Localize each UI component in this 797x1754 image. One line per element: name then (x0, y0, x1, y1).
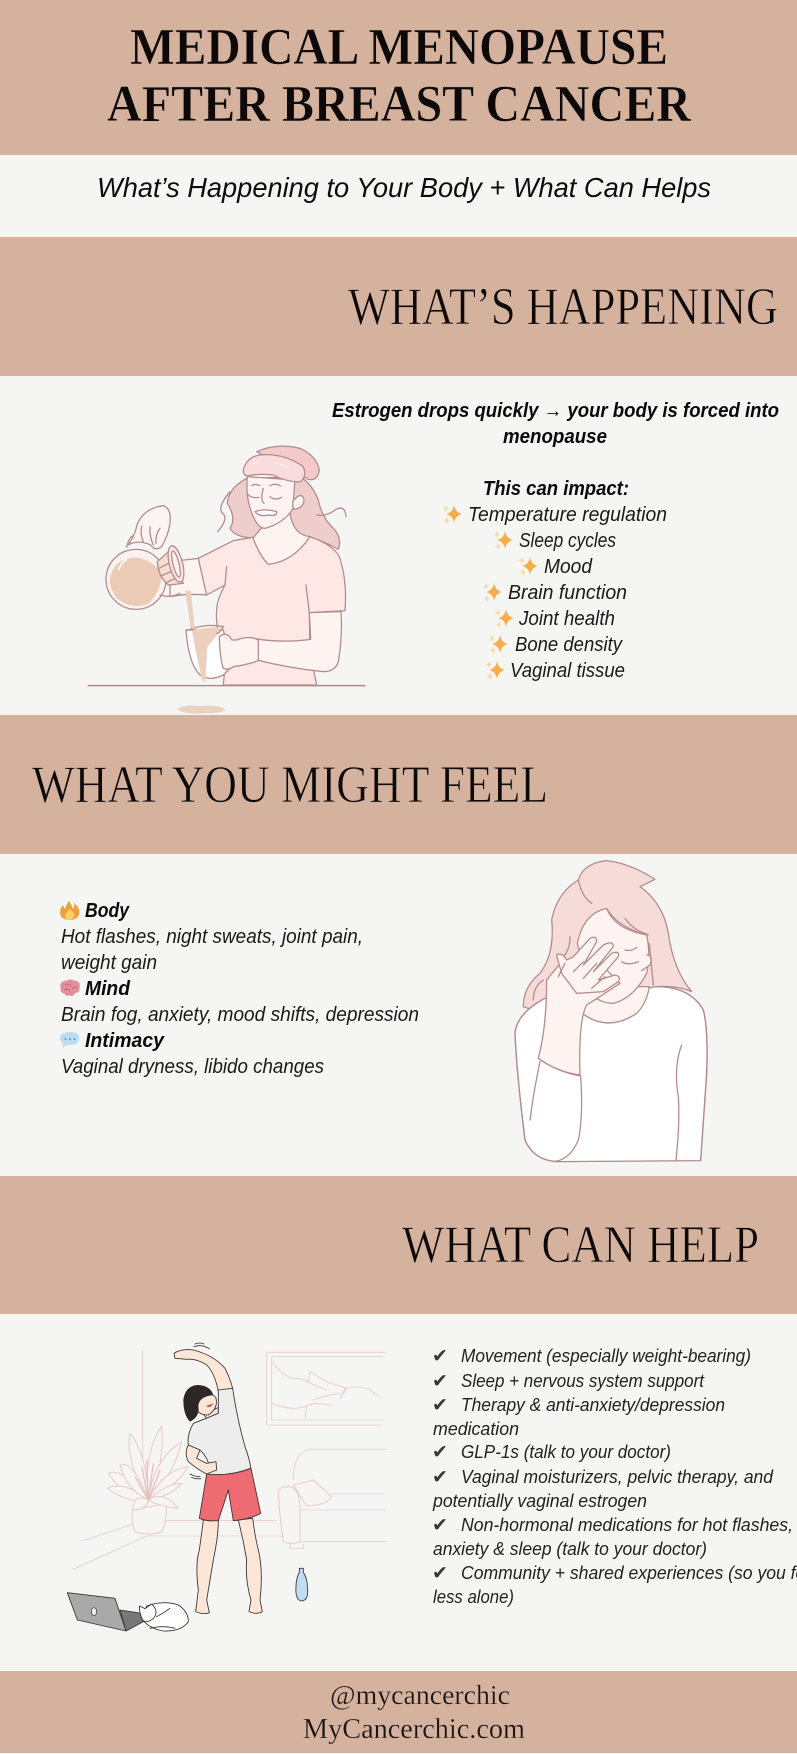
list item: non-hormonal medications: Non-hormonal medications for hot flashes, (461, 1515, 793, 1535)
text block: symptoms: Body (85, 900, 130, 922)
spill on floor (177, 705, 226, 714)
list item: movement: ✔ (432, 1345, 448, 1367)
mug (186, 630, 232, 678)
section heading: what you might feel: WHAT YOU MIGHT FEEL (32, 756, 548, 814)
text block: symptoms: Hot flashes, night sweats, joint pain, (61, 926, 363, 948)
footer (0, 1671, 797, 1753)
sweater (515, 987, 707, 1162)
section heading: what can help (0, 1176, 797, 1314)
list item: vaginal moisturizers: potentially vaginal estrogen (432, 1491, 647, 1511)
text block: symptoms (60, 900, 419, 1078)
hair (523, 861, 692, 1013)
water bottle (296, 1568, 308, 1601)
laptop (67, 1593, 143, 1631)
face (247, 477, 295, 528)
section heading: what's happening (0, 237, 797, 376)
sofa arm and cushion (278, 1487, 300, 1543)
list item: community (432, 1562, 797, 1607)
list item: community: less alone) (433, 1587, 514, 1607)
list item: vaginal tissue: Vaginal tissue (510, 660, 625, 682)
list item: vaginal moisturizers: ✔ (432, 1466, 448, 1488)
list item: vaginal moisturizers (432, 1466, 774, 1511)
footer: @mycancerchic (330, 1680, 510, 1710)
shirt (188, 1388, 251, 1475)
shorts (199, 1468, 261, 1521)
list item: temperature regulation: Temperature regulation (468, 504, 667, 526)
list item: bone density: Bone density (515, 634, 623, 656)
text block: symptoms: Brain fog, anxiety, mood shifts, depression (61, 1004, 419, 1026)
list item: GLP-1s: ✔ (432, 1441, 448, 1463)
fingers (557, 937, 619, 993)
icon: speech bubble (60, 1032, 79, 1048)
raised arm (174, 1350, 233, 1392)
icon: fire (60, 901, 80, 920)
face (577, 908, 649, 1003)
sleeve lines (530, 1045, 682, 1162)
list item: therapy: ✔ (432, 1394, 448, 1416)
table line (88, 683, 366, 688)
section heading: what you might feel (0, 715, 797, 854)
list item: mood (519, 556, 593, 578)
plant (107, 1426, 188, 1534)
room lines (73, 1351, 386, 1569)
list item: therapy: medication (433, 1419, 519, 1439)
list item: community: ✔ (432, 1562, 448, 1584)
title banner: AFTER BREAST CANCER (107, 76, 692, 133)
icon: brain (60, 980, 80, 996)
list item: mood: Mood (544, 556, 593, 578)
list item: therapy (432, 1394, 725, 1439)
list item: vaginal moisturizers: Vaginal moisturizers, pelvic therapy, and (461, 1467, 774, 1487)
right arm (253, 612, 341, 672)
legs (196, 1520, 218, 1614)
list item: sleep: Sleep + nervous system support (461, 1371, 705, 1391)
hand on pot (128, 506, 170, 549)
hand on mug (219, 634, 258, 669)
text block: estrogen impact: menopause (503, 426, 607, 448)
text block: what can help list (432, 1345, 797, 1607)
list item: movement: Movement (especially weight-bearing) (461, 1346, 751, 1366)
bent arm (186, 1445, 217, 1474)
title banner: MEDICAL MENOPAUSE (130, 19, 668, 76)
footer: MyCancerchic.com (303, 1714, 525, 1745)
left forearm (170, 558, 207, 597)
list item: non-hormonal medications (432, 1514, 793, 1559)
shirt (198, 537, 346, 685)
cat (139, 1603, 188, 1631)
text block: symptoms: Intimacy (85, 1030, 165, 1052)
text block: symptoms: Mind (85, 978, 131, 1000)
list item: sleep: ✔ (432, 1370, 448, 1392)
hair strands (533, 880, 653, 1000)
subtitle: What’s Happening to Your Body + What Can Helps (97, 172, 711, 203)
list item: joint health: Joint health (518, 608, 615, 630)
illustration: woman with hand on face (515, 861, 707, 1162)
list item: therapy: Therapy & anti-anxiety/depression (461, 1395, 725, 1415)
coffee pot (127, 535, 152, 547)
text block: estrogen impact: This can impact: (483, 478, 629, 500)
list item: non-hormonal medications: anxiety & sleep (talk to your doctor) (433, 1539, 707, 1559)
hair back (227, 477, 340, 549)
illustration: woman stretching in living room (67, 1343, 386, 1631)
sleep mask (243, 455, 305, 482)
neck (580, 987, 649, 1023)
illustration: woman pouring coffee (88, 446, 366, 714)
list item: non-hormonal medications: ✔ (432, 1514, 448, 1536)
text block: symptoms: weight gain (61, 952, 157, 974)
title banner (0, 0, 797, 155)
list item: GLP-1s: GLP-1s (talk to your doctor) (461, 1442, 671, 1462)
text block: symptoms: Vaginal dryness, libido changes (61, 1056, 324, 1078)
text block: estrogen impact (332, 400, 779, 682)
neck (253, 513, 310, 564)
head (197, 1394, 216, 1415)
coffee stream (185, 591, 195, 628)
list item: brain function: Brain function (508, 582, 627, 604)
forearm (538, 962, 620, 1075)
neck and face (204, 1407, 218, 1420)
list item: sleep cycles: Sleep cycles (519, 530, 616, 552)
